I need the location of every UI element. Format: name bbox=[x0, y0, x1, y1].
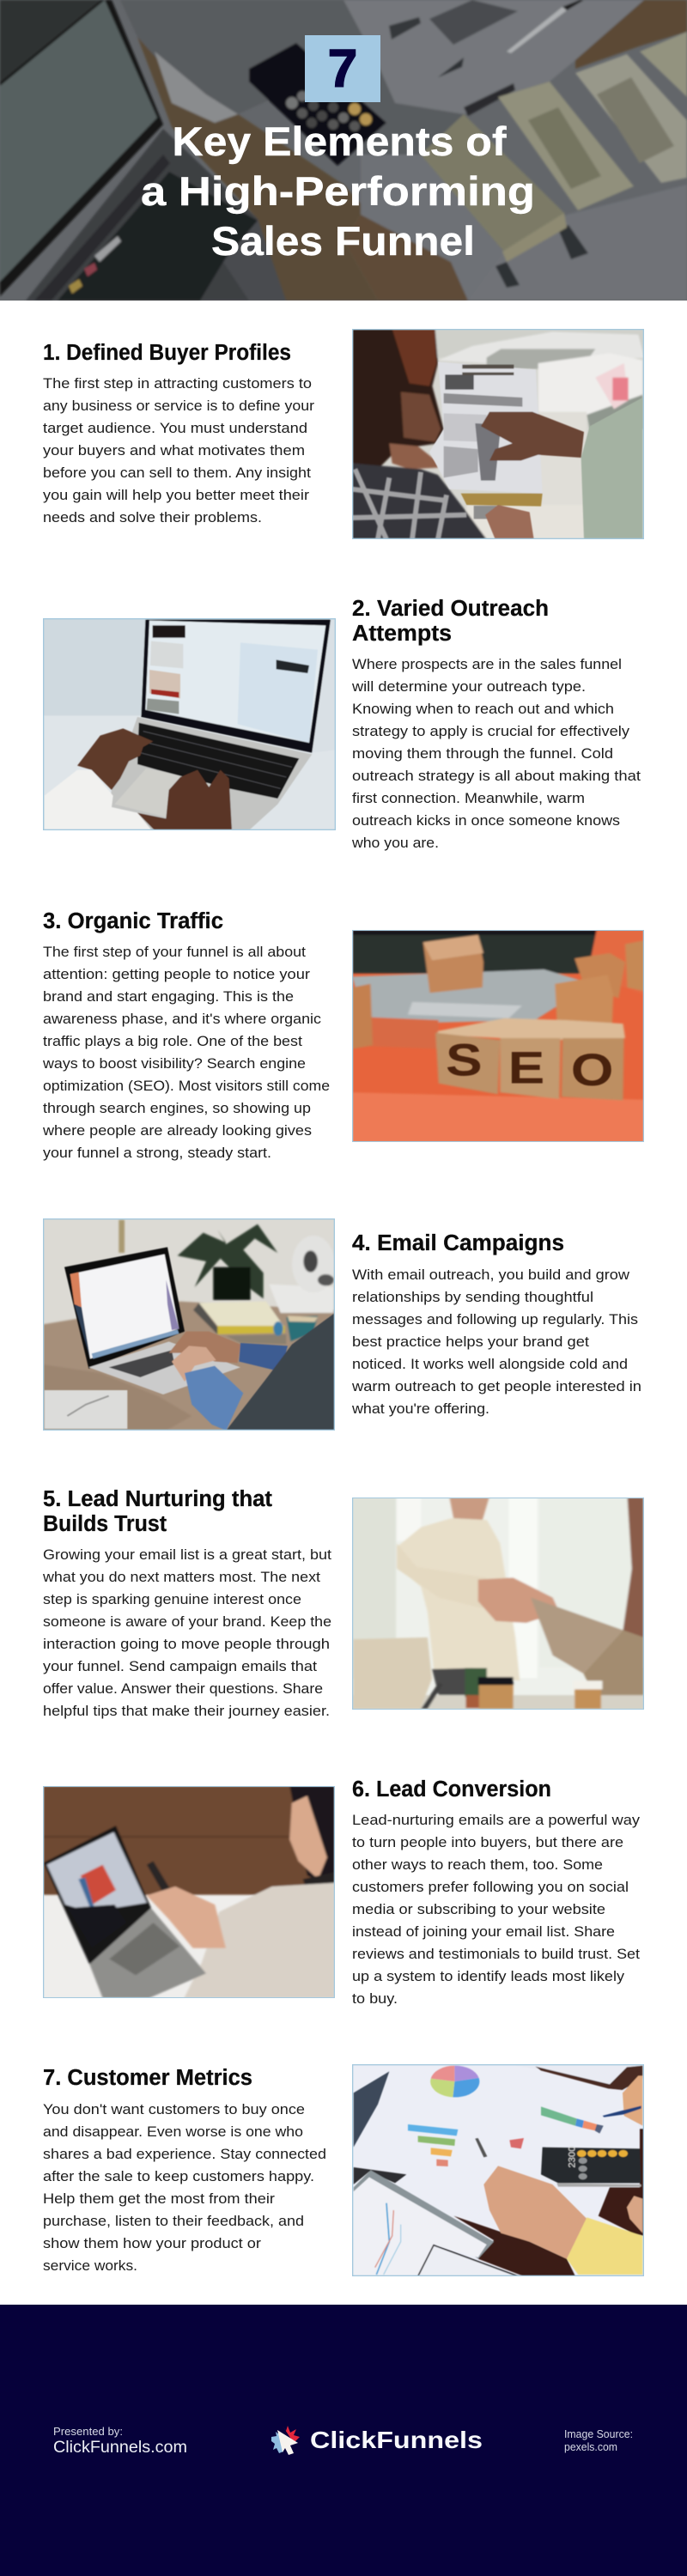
body text bbox=[351, 657, 641, 851]
icon: ClickFunnels cursor bbox=[271, 2426, 300, 2455]
body text: what you're offering. bbox=[351, 1401, 489, 1417]
body text: helpful tips that make their journey easier. bbox=[43, 1704, 330, 1719]
body text: needs and solve their problems. bbox=[43, 510, 262, 526]
image source bbox=[564, 2428, 633, 2453]
panel: 4. Email Campaigns bbox=[43, 1218, 641, 1431]
heading: 7. Customer Metrics bbox=[43, 2066, 252, 2090]
body text: outreach strategy is all about making that bbox=[352, 769, 641, 784]
body text: instead of joining your email list. Share bbox=[352, 1924, 615, 1940]
body text: brand and start engaging. This is the bbox=[43, 989, 294, 1005]
photo: reviewing a clipboard document bbox=[352, 329, 644, 539]
body text: offer value. Answer their questions. Share bbox=[43, 1681, 323, 1697]
presented by bbox=[53, 2426, 187, 2457]
body text bbox=[351, 1267, 641, 1417]
panel: 1. Defined Buyer Profiles bbox=[43, 329, 644, 539]
body text: Growing your email list is a great start, but bbox=[43, 1547, 332, 1563]
body text: interaction going to move people through bbox=[43, 1637, 330, 1652]
photo: person working on a laptop at a desk bbox=[43, 1218, 335, 1431]
title: Sales Funnel bbox=[211, 218, 475, 264]
heading: 2. Varied Outreach bbox=[352, 597, 549, 621]
image source: pexels.com bbox=[564, 2441, 617, 2453]
panel: 2. Varied Outreach Attempts bbox=[43, 597, 641, 851]
body text bbox=[352, 1813, 641, 2007]
body text: to buy. bbox=[352, 1991, 398, 2007]
heading: 4. Email Campaigns bbox=[352, 1231, 564, 1255]
number badge: 7 bbox=[328, 39, 357, 99]
body text bbox=[42, 945, 330, 1161]
footer bbox=[0, 2305, 687, 2576]
title: Key Elements of bbox=[172, 118, 507, 164]
body text: The first step in attracting customers to bbox=[43, 376, 312, 392]
body text: target audience. You must understand bbox=[43, 421, 307, 436]
body text: first connection. Meanwhile, warm bbox=[352, 791, 585, 806]
body text: your buyers and what motivates them bbox=[43, 443, 305, 459]
body text: any business or service is to define your bbox=[43, 398, 315, 414]
body text: purchase, listen to their feedback, and bbox=[43, 2214, 304, 2229]
body text: to turn people into buyers, but there are bbox=[352, 1835, 623, 1850]
body text: traffic plays a big role. One of the best bbox=[43, 1034, 303, 1049]
body text: customers prefer following you on social bbox=[352, 1880, 629, 1895]
body text: Lead-nurturing emails are a powerful way bbox=[352, 1813, 641, 1828]
hero header bbox=[0, 0, 687, 301]
panel: 5. Lead Nurturing that Builds Trust bbox=[42, 1487, 645, 1719]
body text: what you do next matters most. The next bbox=[42, 1570, 321, 1585]
body text: after the sale to keep customers happy. bbox=[43, 2169, 314, 2184]
photo: charts, calculator and hand on desk: 2300 bbox=[567, 2146, 577, 2168]
body text: Knowing when to reach out and which bbox=[352, 702, 614, 717]
body text: Help them get the most from their bbox=[43, 2191, 276, 2207]
wordmark: ClickFunnels bbox=[310, 2427, 483, 2453]
body text: messages and following up regularly. This bbox=[352, 1312, 638, 1327]
photo: wooden SEO blocks: E bbox=[508, 1043, 544, 1093]
body text: someone is aware of your brand. Keep the bbox=[43, 1614, 331, 1630]
body text: noticed. It works well alongside cold and bbox=[352, 1357, 628, 1372]
body text: your funnel. Send campaign emails that bbox=[43, 1659, 318, 1674]
body text: step is sparking genuine interest once bbox=[43, 1592, 301, 1607]
heading bbox=[43, 1487, 272, 1536]
panel: 7. Customer Metrics bbox=[43, 2064, 644, 2276]
body text: optimization (SEO). Most visitors still come bbox=[43, 1078, 330, 1094]
heading: Builds Trust bbox=[43, 1512, 167, 1536]
body text: service works. bbox=[43, 2258, 137, 2274]
body text: your funnel a strong, steady start. bbox=[43, 1145, 271, 1161]
image source: Image Source: bbox=[564, 2428, 633, 2440]
body text: The first step of your funnel is all about bbox=[43, 945, 307, 960]
body text: warm outreach to get people interested in bbox=[351, 1379, 641, 1394]
photo: hands typing on a laptop bbox=[43, 618, 336, 830]
body text: through search engines, so showing up bbox=[43, 1101, 311, 1116]
body text: You don't want customers to buy once bbox=[43, 2102, 305, 2117]
photo: wooden SEO blocks bbox=[352, 930, 644, 1142]
panel: 6. Lead Conversion bbox=[43, 1777, 641, 2007]
heading: Attempts bbox=[352, 622, 452, 646]
title bbox=[141, 118, 535, 264]
body text: you gain will help you better meet their bbox=[43, 488, 310, 503]
body text bbox=[42, 1547, 332, 1719]
body text: attention: getting people to notice your bbox=[43, 967, 311, 982]
heading: 3. Organic Traffic bbox=[43, 909, 223, 933]
body text: and disappear. Even worse is one who bbox=[43, 2124, 303, 2140]
body text: moving them through the funnel. Cold bbox=[352, 746, 613, 762]
body text: shares a bad experience. Stay connected bbox=[43, 2147, 326, 2162]
body text: up a system to identify leads most likely bbox=[352, 1969, 625, 1984]
presented by: ClickFunnels.com bbox=[53, 2439, 187, 2457]
body text: outreach kicks in once someone knows bbox=[352, 813, 620, 829]
number badge bbox=[305, 35, 380, 102]
heading bbox=[352, 597, 549, 646]
decorative photo layers bbox=[120, 0, 644, 155]
body text bbox=[43, 376, 315, 526]
photo: business handshake bbox=[352, 1498, 644, 1710]
heading: 6. Lead Conversion bbox=[352, 1777, 551, 1801]
body text: media or subscribing to your website bbox=[352, 1902, 605, 1917]
photo: charts, calculator and hand on desk bbox=[352, 2064, 644, 2276]
body text: With email outreach, you build and grow bbox=[352, 1267, 629, 1283]
body text: Where prospects are in the sales funnel bbox=[352, 657, 622, 672]
panel: 3. Organic Traffic bbox=[42, 909, 644, 1161]
photo: woman with phone and laptop bbox=[43, 1786, 335, 1998]
body text: who you are. bbox=[351, 835, 439, 851]
body text: where people are already looking gives bbox=[42, 1123, 312, 1139]
body text: show them how your product or bbox=[43, 2236, 262, 2251]
body text: before you can sell to them. Any insight bbox=[43, 465, 312, 481]
body text: reviews and testimonials to build trust. Set bbox=[352, 1947, 641, 1962]
hero background photo: desk with laptop, calculator and money bbox=[0, 0, 687, 301]
body text bbox=[43, 2102, 326, 2274]
presented by: Presented by: bbox=[53, 2426, 123, 2438]
body text: strategy to apply is crucial for effectively bbox=[352, 724, 630, 739]
body text: other ways to reach them, too. Some bbox=[352, 1857, 603, 1873]
heading: 5. Lead Nurturing that bbox=[43, 1487, 272, 1511]
photo: wooden SEO blocks: O bbox=[571, 1045, 614, 1096]
body text: ways to boost visibility? Search engine bbox=[42, 1056, 306, 1072]
title: a High-Performing bbox=[141, 168, 535, 214]
body text: awareness phase, and it's where organic bbox=[43, 1012, 321, 1027]
body text: will determine your outreach type. bbox=[351, 679, 586, 695]
logo bbox=[271, 2426, 483, 2455]
body text: best practice helps your brand get bbox=[352, 1334, 590, 1350]
heading: 1. Defined Buyer Profiles bbox=[43, 341, 291, 365]
body text: relationships by sending thoughtful bbox=[352, 1290, 593, 1305]
photo: wooden SEO blocks: S bbox=[446, 1036, 483, 1085]
